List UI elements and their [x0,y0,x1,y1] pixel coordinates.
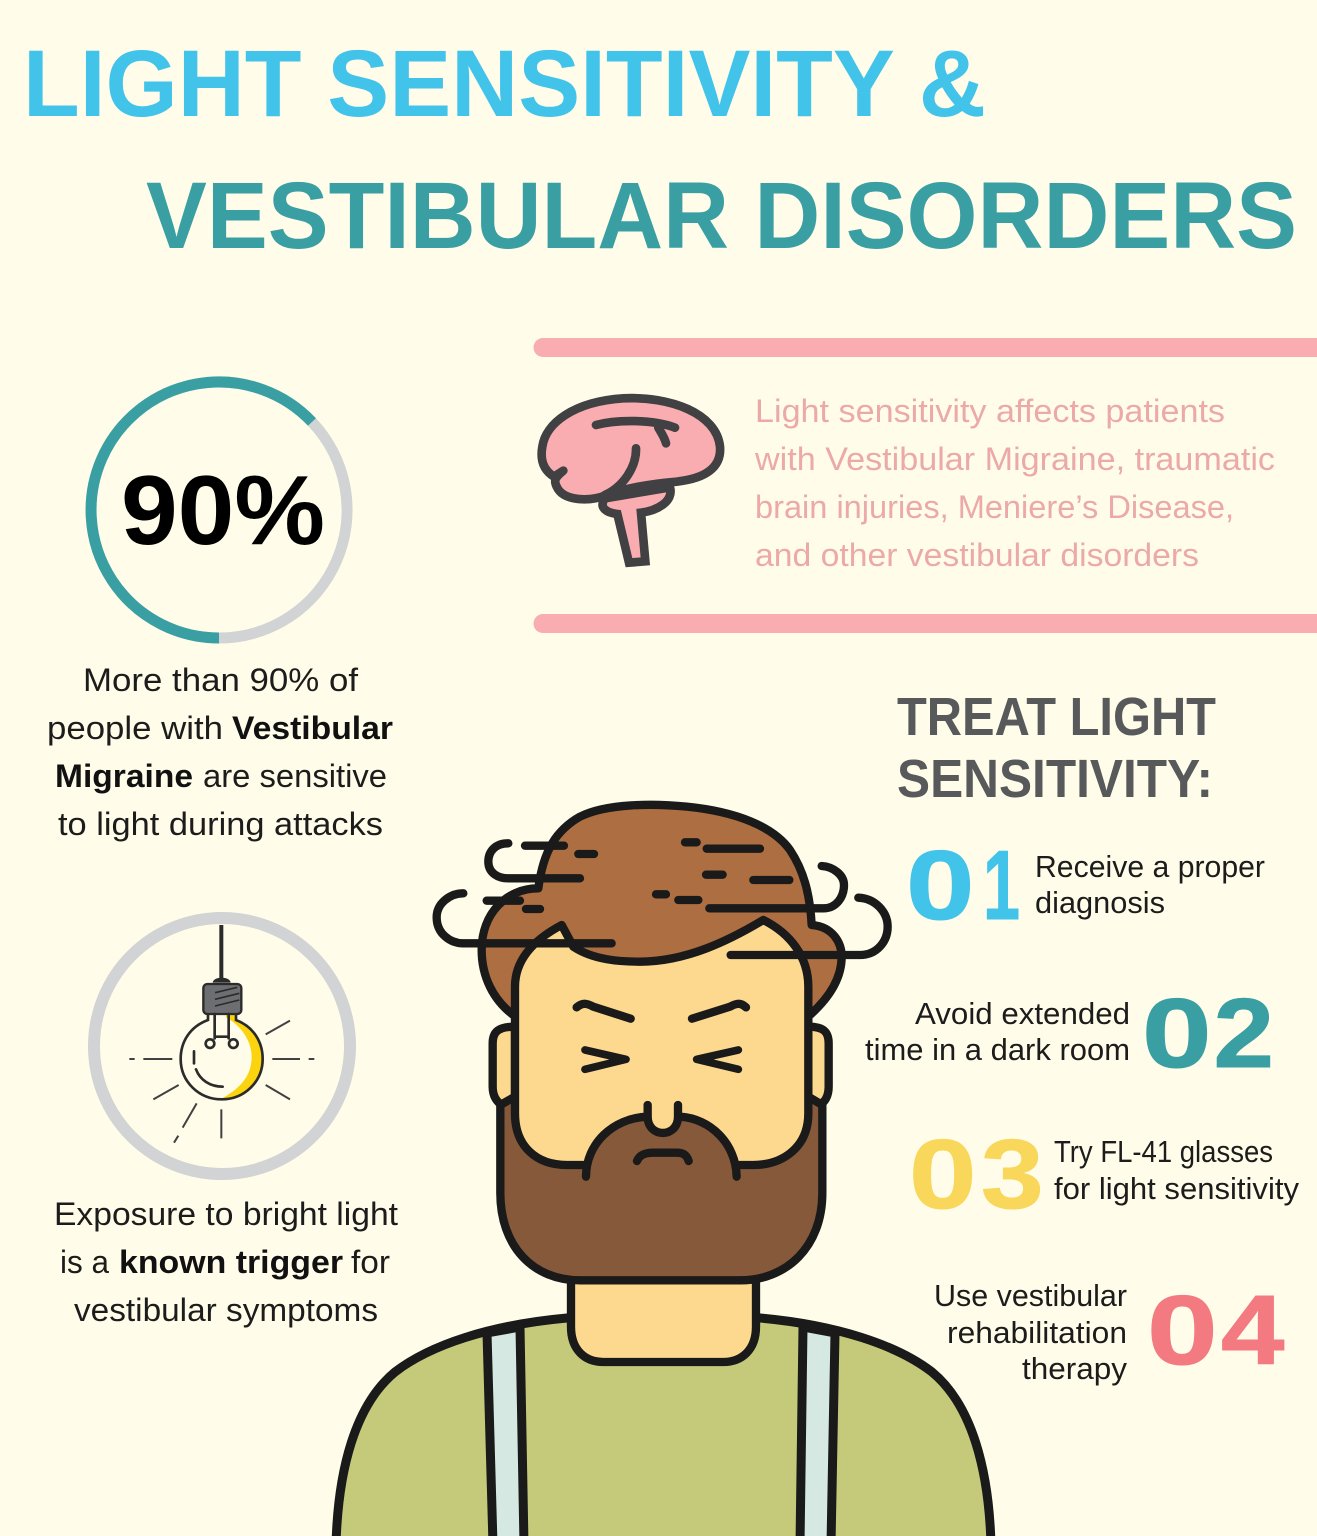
icon: light bulb in circle [94,918,350,1174]
neck [571,1273,756,1362]
step 02 [865,978,1274,1088]
step 03: 3 [981,1119,1044,1229]
step 02: 0 [1142,978,1212,1088]
step 02: Avoid extended [915,996,1130,1031]
step 03: for light sensitivity [1054,1171,1299,1206]
step 01: 0 [906,830,974,940]
hair [482,805,842,1015]
text block: conditions affected: and other vestibular disorders [755,537,1199,573]
step 01: Receive a proper [1035,849,1265,884]
text block: 90 percent description: Vestibular [232,710,393,746]
title: VESTIBULAR DISORDERS [146,163,1297,269]
text block: conditions affected: Light sensitivity affects patients [755,393,1225,429]
ears [493,1027,829,1107]
text block: 90 percent description: to light during attacks [58,806,383,842]
bottom pink bar [534,614,1317,633]
face [515,920,808,1165]
step 01 [906,830,1265,940]
mouth [637,1153,689,1161]
heading: SENSITIVITY: [897,749,1213,809]
step 03: Try FL-41 glasses [1054,1134,1273,1169]
text block: conditions affected [754,393,1275,573]
beard [500,1097,822,1280]
heading [897,687,1216,809]
step 04 [934,1275,1284,1386]
motion lines [437,842,888,955]
step 04: 4 [1221,1275,1284,1385]
moustache [586,1117,737,1190]
text block: trigger description: vestibular symptoms [74,1292,378,1328]
step 04: rehabilitation [947,1315,1127,1350]
shirt and suspenders [336,1318,991,1536]
panel: 90 percent statistic [47,382,393,842]
head [437,805,888,1362]
heading: TREAT LIGHT [897,687,1216,747]
text block: conditions affected: brain injuries, Meniere’s Disease, [755,489,1234,525]
panel: treatments [865,687,1299,1386]
eyebrows [577,1004,746,1019]
text block: 90 percent description [47,662,393,842]
text block: 90 percent description: are sensitive [203,758,387,794]
text block: trigger description: Exposure to bright light [54,1196,398,1232]
eyes [585,1050,738,1069]
step 04: therapy [1022,1351,1128,1386]
top pink bar [534,338,1317,357]
donut value: 90% [121,455,325,565]
text block: trigger description: for [351,1244,390,1280]
step 03 [909,1119,1299,1229]
panel: brain callout [534,338,1317,633]
panel: bright light trigger [54,918,398,1328]
title [23,31,1297,269]
illustration: dizzy bearded man [336,805,991,1536]
step 04: 0 [1147,1275,1218,1385]
title: LIGHT SENSITIVITY & [23,31,986,137]
text block: trigger description: known trigger [119,1244,343,1280]
text block: 90 percent description: people with [47,710,223,746]
text block: 90 percent description: More than 90% of [83,662,358,698]
step 01: 1 [983,830,1020,940]
donut chart: 90% [91,382,347,638]
icon: brain [542,398,720,563]
text block: 90 percent description: Migraine [55,758,193,794]
step 01: diagnosis [1035,885,1165,920]
step 03: 0 [909,1119,976,1229]
step 02: 2 [1214,978,1274,1088]
text block: trigger description [54,1196,398,1328]
step 02: time in a dark room [865,1032,1130,1067]
text block: trigger description: is a [60,1244,109,1280]
nose [648,1105,678,1133]
step 04: Use vestibular [934,1278,1127,1313]
text block: conditions affected: with Vestibular Migraine, traumatic [754,441,1275,477]
